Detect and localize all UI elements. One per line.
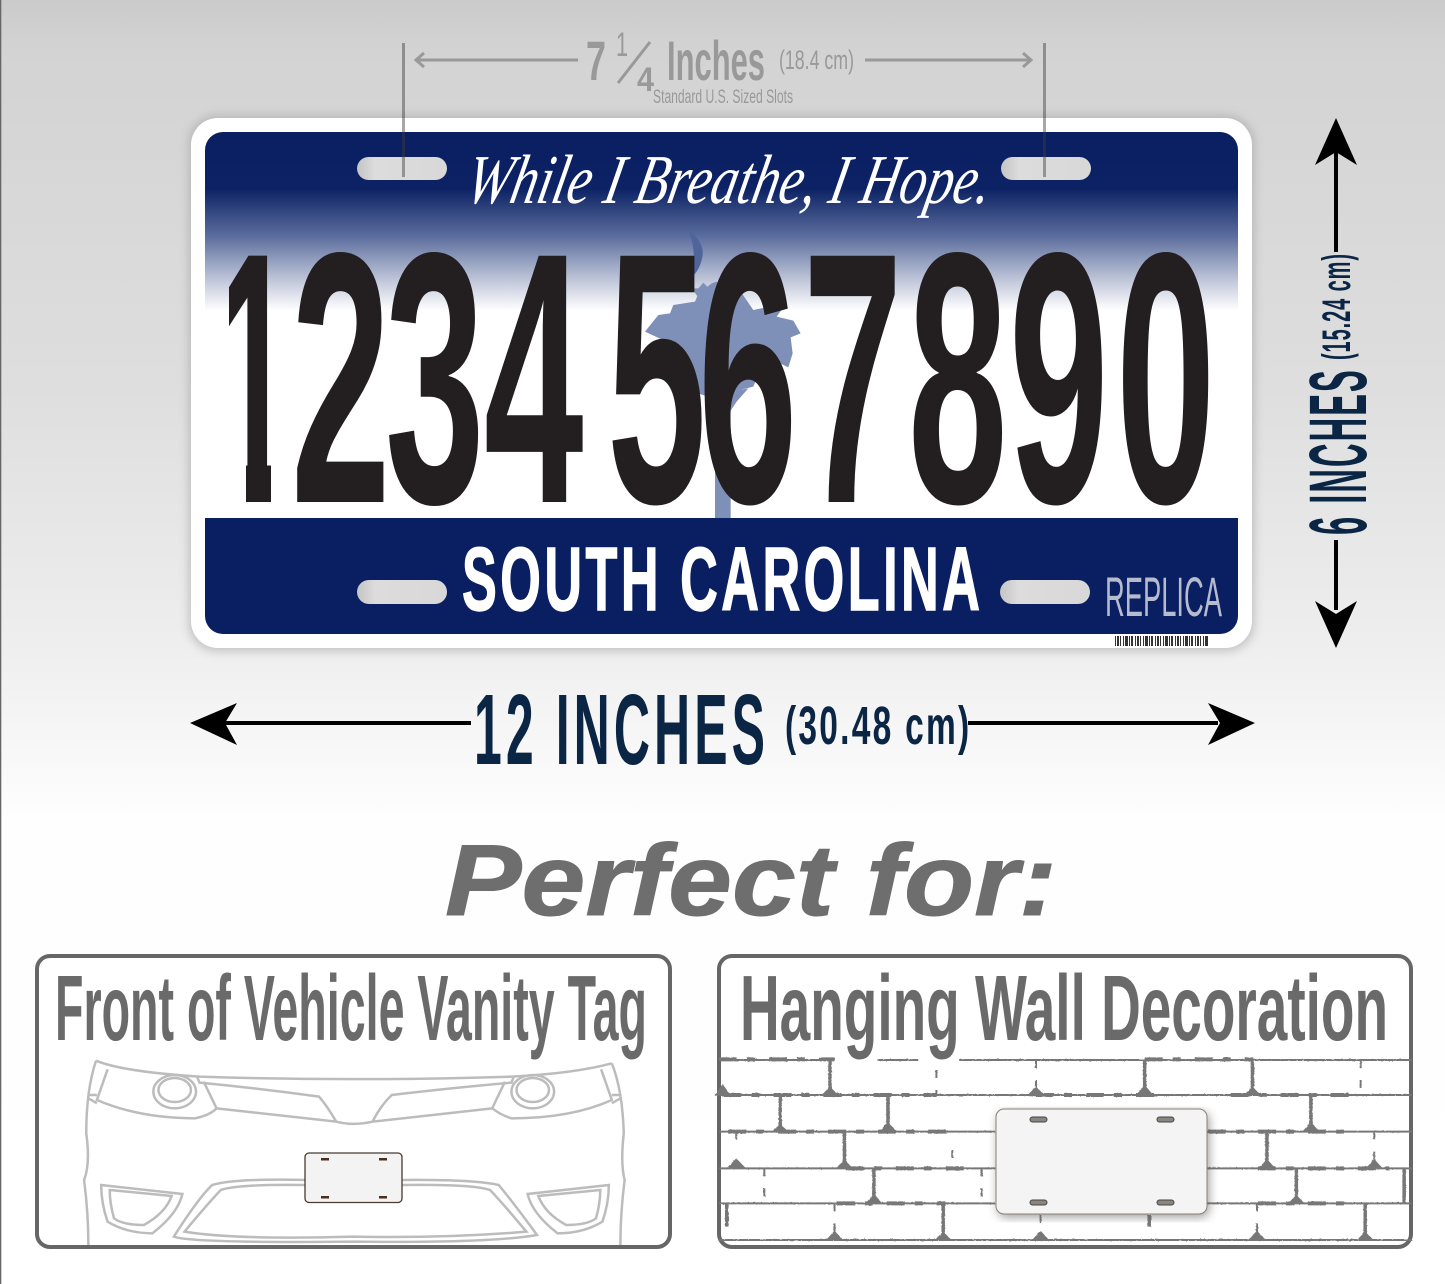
width arrow [190,703,1255,745]
left and right guide lines [402,43,1046,177]
slot spacing label [586,26,854,108]
height arrow [1315,118,1357,648]
slots [357,157,1091,604]
license plate [189,116,1254,651]
slot spacing label: Inches [667,29,765,92]
state name: SOUTH CAROLINA [462,528,980,630]
panel: hanging wall decoration [715,956,1412,1247]
height label: 6 INCHES [1292,370,1384,535]
plate blue gradient field [205,132,1238,634]
width dimension [190,673,1255,786]
mini plate on wall [996,1109,1209,1217]
license plate: REPLICA [1105,565,1222,628]
slot spacing label: 7 [586,29,606,92]
panel: front of vehicle [37,956,670,1247]
panel frame [37,956,670,1247]
arrows [416,53,1031,67]
slot spacing label: 1 [616,26,628,64]
car front outline [84,1061,625,1245]
tagline: While I Breathe, I Hope. [460,142,1000,219]
slot spacing dimension [402,26,1046,177]
height metric label: (15.24 cm) [1313,254,1359,360]
slot spacing label: Standard U.S. Sized Slots [653,87,793,108]
panel title: Front of Vehicle Vanity Tag [55,956,647,1060]
slot spacing label: 4 [637,61,654,99]
width label: 12 INCHES [474,673,765,786]
bottom navy band [205,518,1238,634]
plate white base [191,118,1252,648]
plate number: 234567890 [291,178,1216,578]
plate shadow [189,116,1254,651]
heading: perfect for: Perfect for: [445,825,1057,937]
barcode [1115,636,1208,646]
panel frame [719,956,1411,1247]
icon: crescent moon and palmetto tree [645,230,801,520]
slot spacing label: (18.4 cm) [779,45,854,75]
plate number [229,252,1208,506]
height dimension [1292,118,1384,648]
brick wall [715,1059,1412,1241]
mini plate on car [305,1153,402,1202]
plate number: 1 [214,178,294,578]
width metric label: (30.48 cm) [785,695,969,756]
